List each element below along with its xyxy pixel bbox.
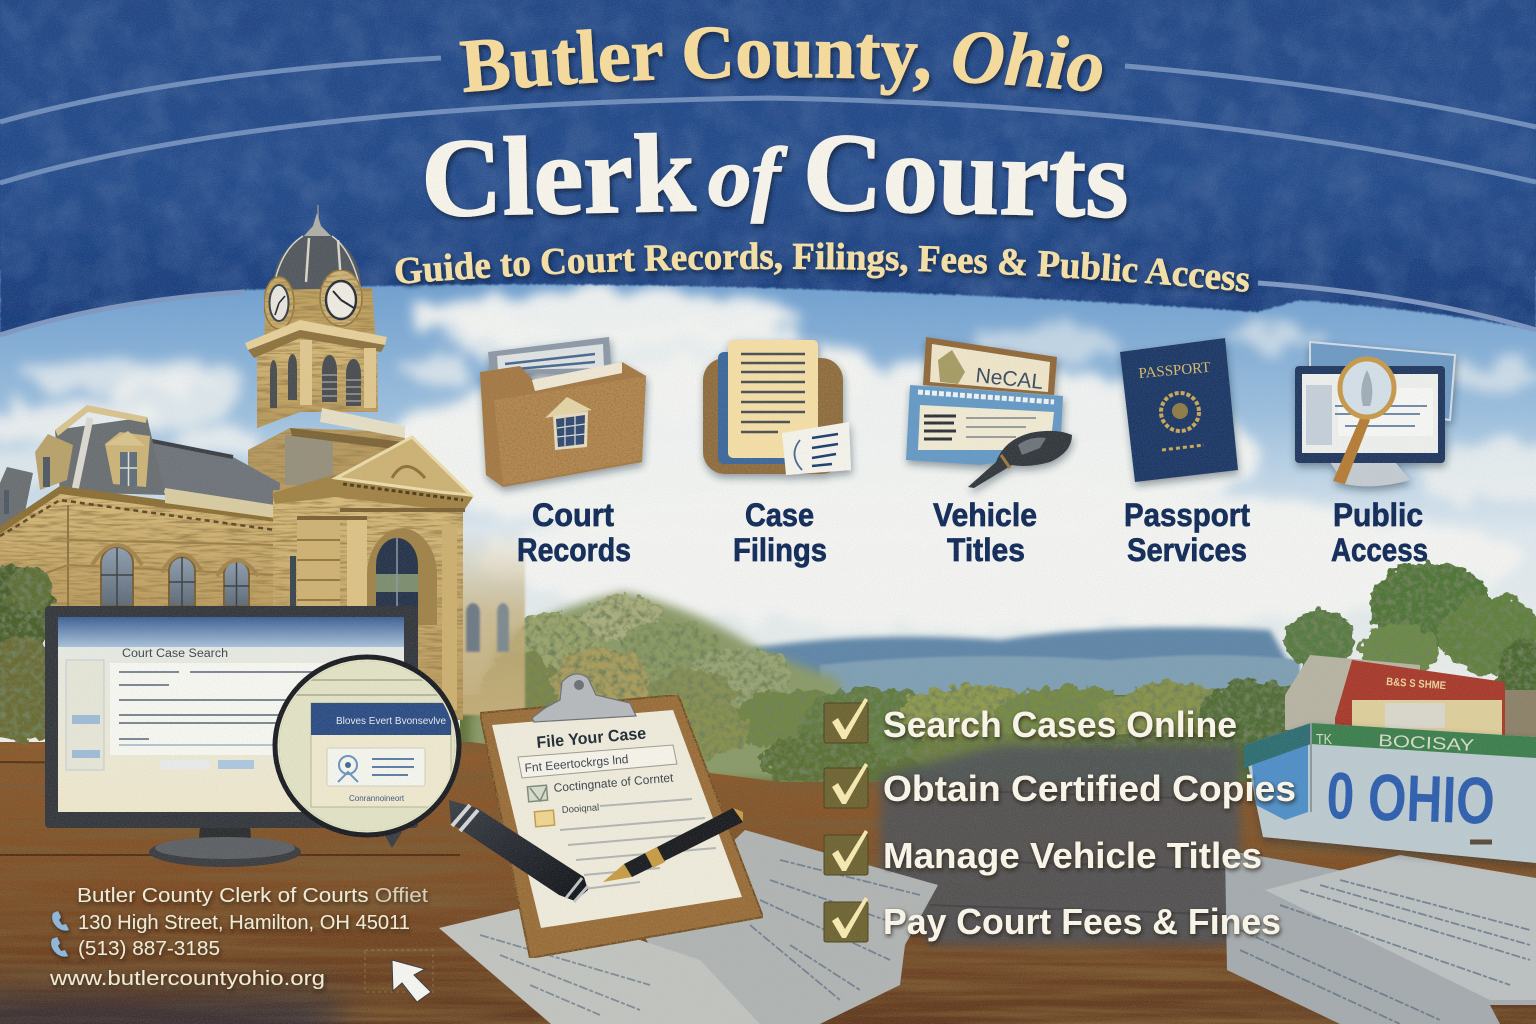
banner: blue curved header: [0, 0, 1536, 335]
clipboard: File Your Case: Dooiqnal: [561, 802, 600, 816]
title: Butler County, Ohio: Butler County, Ohio: [459, 26, 1106, 102]
clock faces: [270, 281, 356, 321]
icon: phone (address): [52, 911, 69, 931]
pen: [603, 808, 743, 882]
faded right wing of courthouse: [455, 530, 525, 715]
title: Clerk of Courts: Courts: [801, 110, 1130, 242]
subtitle: guide description: Guide to Court Records, Filings, Fees & Public Access: [395, 242, 1253, 297]
office contact details: Butler County Clerk of Courts Offiet: [77, 885, 428, 907]
icon: case filings documents: [703, 340, 851, 475]
main wing stone facade: [0, 486, 278, 625]
clipboard: File Your Case: File Your Case: [536, 724, 647, 752]
label: Vehicle Titles: Vehicle: [933, 497, 1037, 533]
item: Obtain Certified Copies: Obtain Certified Copies: [883, 768, 1296, 809]
Ohio license plate: BOCISAY: [1378, 731, 1475, 755]
entrance portico with arch: [272, 437, 473, 720]
title: Clerk of Courts: Clerk: [420, 111, 697, 241]
magnifying glass: [275, 657, 588, 902]
office contact details: (513) 887-3185: [78, 938, 220, 960]
monitor: Court Case Search: [45, 606, 418, 867]
icon: passport: [1120, 338, 1238, 482]
clock tower drum with clocks: [264, 270, 376, 348]
background: sky and clouds: [0, 270, 1536, 750]
icon labels: [517, 497, 1428, 568]
icon: public access monitor with magnifier: [1295, 342, 1455, 486]
tower body with louvred windows: [245, 320, 387, 428]
office contact details: [49, 885, 428, 990]
title: Clerk of Courts: [420, 110, 1130, 242]
monitor: Court Case Search: Court Case Search: [122, 648, 228, 660]
label: Court Records: Records: [517, 532, 631, 568]
label: Vehicle Titles: Titles: [947, 532, 1025, 568]
label: Court Records: Court: [532, 497, 614, 533]
label: Passport Services: Passport: [1124, 497, 1250, 533]
table: wooden desk: [0, 742, 1536, 1024]
clipboard: File Your Case: Coctingnate of Corntet: [553, 771, 675, 795]
icon: vehicle title cards and key: NeCAL: [974, 364, 1044, 394]
tree left of monitor: [0, 566, 66, 744]
label: Passport Services: [1124, 497, 1250, 568]
landscape: distant hills and trees: [460, 563, 1536, 795]
courthouse illustration: [0, 205, 525, 720]
icon: mouse cursor arrow: [365, 950, 433, 1002]
icon: court records folder: [480, 337, 646, 487]
label: Passport Services: Services: [1127, 532, 1247, 568]
label: Case Filings: [733, 497, 827, 568]
office contact details: 130 High Street, Hamilton, OH 45011: [78, 912, 410, 934]
label: Case Filings: Case: [745, 497, 814, 533]
label: Public Access: Public: [1333, 497, 1423, 533]
title: Clerk of Courts: of: [708, 131, 787, 224]
magnified card: [275, 657, 455, 837]
clock tower spire and dome: [273, 205, 361, 292]
checklist of services: [824, 698, 1296, 942]
label: Vehicle Titles: [933, 497, 1037, 568]
clipboard metal clip: [532, 674, 636, 722]
icon: vehicle title cards and key: [906, 337, 1072, 488]
magnified card: Bloves Evert Bvonsevlve: [336, 716, 446, 727]
item: Manage Vehicle Titles: Manage Vehicle Titles: [883, 835, 1262, 876]
roadside building with red sign: B&S S SHME: [1386, 676, 1446, 692]
label: Case Filings: Filings: [733, 532, 827, 568]
monitor stand: [149, 826, 301, 867]
main wing roof with dormers: [0, 405, 280, 528]
icon: phone (telephone): [51, 937, 68, 957]
clipboard: File Your Case: [480, 674, 763, 958]
label: Public Access: Access: [1331, 532, 1428, 568]
icon: passport: PASSPORT: [1138, 360, 1211, 382]
document stacks on the desk: [439, 745, 1536, 1024]
magnified card: Conrannoineort: [349, 794, 405, 803]
item: Search Cases Online: Search Cases Online: [883, 704, 1237, 745]
lower tower and balustrade: [248, 408, 405, 495]
Ohio license plate: TK: [1316, 731, 1332, 748]
clipboard: File Your Case: Fnt Eeertockrgs lnd: [524, 752, 629, 775]
office contact details: www.butlercountyohio.org: [49, 968, 325, 990]
label: Court Records: [517, 497, 631, 568]
Ohio license plate: [1244, 723, 1536, 863]
item: Pay Court Fees & Fines: Pay Court Fees & Fines: [883, 901, 1281, 942]
label: Public Access: [1331, 497, 1428, 568]
roadside building with red sign: [1285, 655, 1536, 740]
